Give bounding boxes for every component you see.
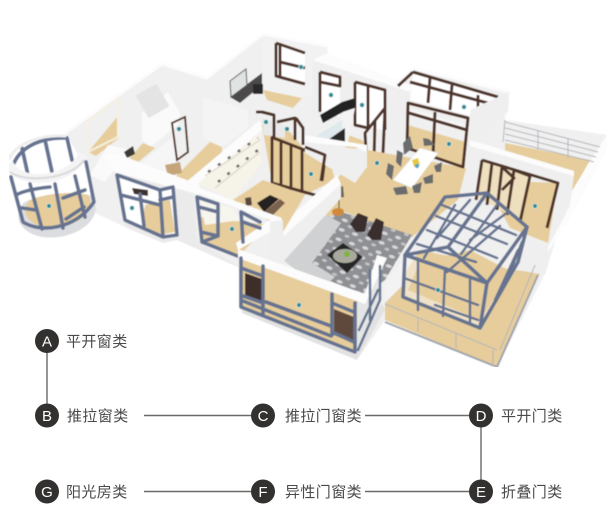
front room with slate windows (238, 249, 387, 360)
office floor and desk (233, 180, 305, 232)
folding door room wall (462, 140, 574, 243)
sunroom frame (403, 193, 527, 328)
legend A (35, 329, 128, 353)
legend F (251, 480, 362, 504)
house base silhouette (65, 33, 607, 367)
legend B: B (42, 408, 52, 425)
legend A: 平开窗类 (66, 332, 128, 350)
legend B: 推拉窗类 (67, 407, 129, 425)
left wing: bedroom (87, 84, 222, 186)
partition wall with kitchen windows (312, 53, 412, 167)
folding door (365, 108, 385, 167)
legend A: A (42, 334, 52, 350)
floor lamp and side table (332, 186, 344, 216)
sliding window wing (197, 187, 283, 268)
legend C: C (258, 408, 269, 425)
coffee table (327, 243, 363, 273)
legend F: 异性门窗类 (285, 483, 362, 501)
back rooms and doors (256, 112, 335, 197)
sunroom terrace floor (385, 225, 562, 367)
left living wall (280, 175, 341, 262)
legend D: 平开门类 (501, 408, 563, 425)
legend D: D (476, 408, 487, 425)
desk and wall art (230, 73, 262, 103)
front wall left wing with bay window (105, 153, 240, 268)
legend D (469, 404, 563, 428)
dining table and chairs (386, 136, 442, 195)
room: upper bedroom with window (230, 36, 327, 108)
sofa (283, 215, 341, 283)
legend F: F (258, 484, 268, 501)
legend G: 阳光房类 (66, 484, 128, 501)
legend E: E (476, 484, 486, 501)
central partition block (203, 97, 248, 147)
legend B (35, 404, 129, 428)
legend E (469, 480, 563, 504)
legend E: 折叠门类 (501, 484, 563, 501)
sliding door (271, 137, 325, 197)
wall top highlights (65, 34, 509, 133)
round window bay (9, 136, 100, 243)
location markers (47, 65, 537, 307)
floor plan illustration (9, 33, 607, 367)
legend C (251, 404, 362, 428)
legend C: 推拉门窗类 (285, 407, 362, 425)
front partition wall (305, 135, 367, 190)
living and dining floor (325, 150, 466, 237)
kitchen island (320, 98, 355, 123)
legend G (35, 480, 128, 504)
right terrace (503, 120, 607, 227)
rear dining room with brown windows (398, 72, 509, 167)
legend G: G (41, 484, 53, 501)
armchairs (350, 213, 384, 240)
legend connector lines (47, 352, 481, 492)
living room rug (290, 213, 412, 295)
bookshelf wall (185, 120, 262, 200)
